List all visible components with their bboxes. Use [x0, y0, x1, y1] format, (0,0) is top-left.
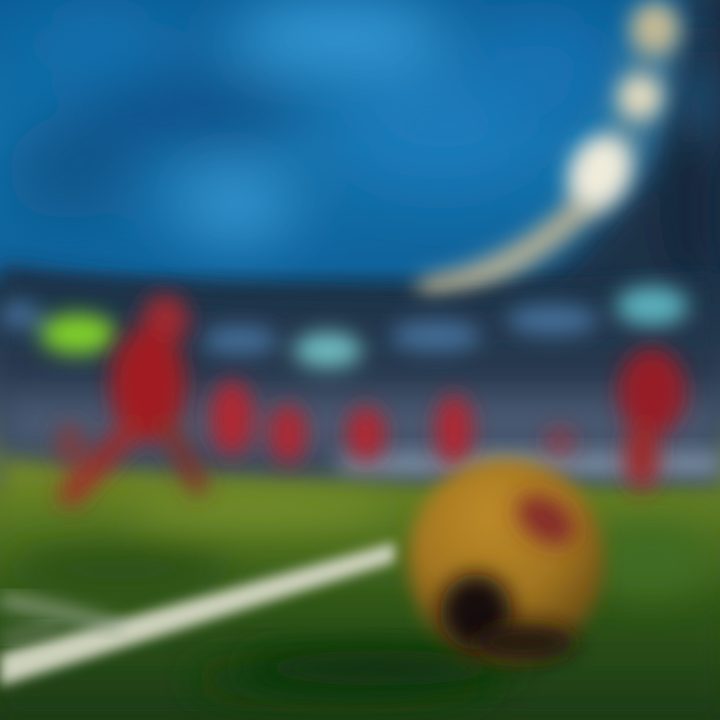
stadium screens — [0, 286, 688, 368]
screen: pale cyan centre — [294, 332, 362, 368]
stadium roof, right side — [430, 40, 720, 320]
ball patch: red — [508, 485, 584, 555]
ball patch: dark — [440, 574, 512, 650]
football — [408, 458, 604, 662]
stands — [0, 265, 720, 490]
ball shade: underside — [473, 624, 577, 660]
stadium floodlights arc — [430, 2, 679, 290]
player: mid group — [210, 380, 576, 466]
players — [56, 294, 686, 495]
crowd glow along pitch edge — [340, 452, 720, 476]
screen: lime green — [40, 314, 116, 354]
sky patches — [5, 6, 605, 237]
player: large left — [56, 294, 198, 495]
screen: blue panels — [0, 302, 598, 354]
ball shadow — [240, 650, 520, 686]
white pitch lines — [0, 542, 395, 686]
right edge darkening — [660, 0, 720, 300]
pitch shading — [10, 494, 710, 702]
screen: pale cyan right — [616, 286, 688, 326]
pitch — [0, 458, 720, 720]
player: right — [618, 348, 686, 491]
